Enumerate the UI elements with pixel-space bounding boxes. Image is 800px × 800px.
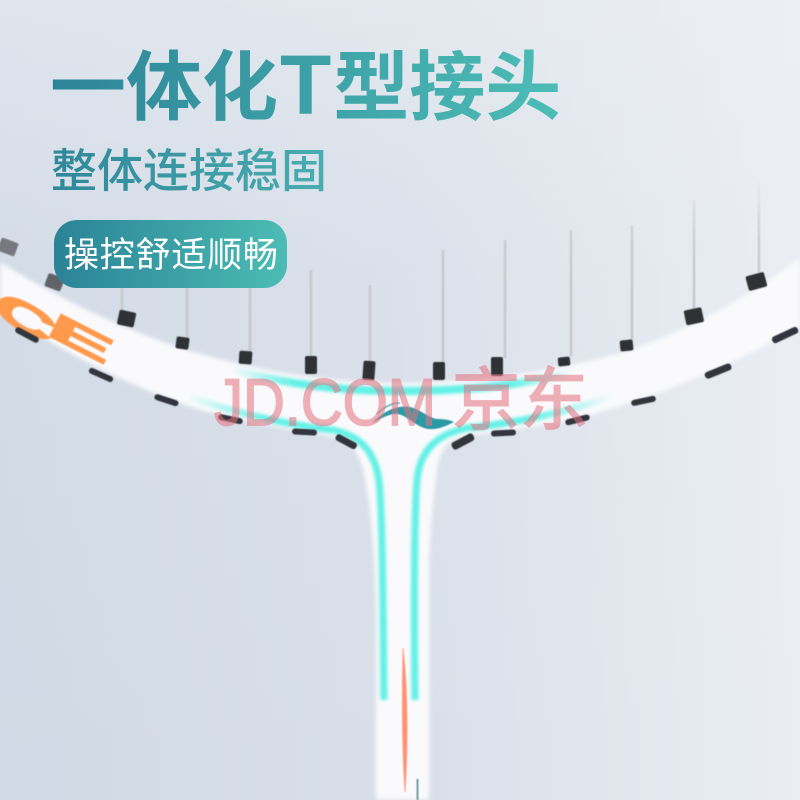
Li-Ning logo — [372, 403, 454, 429]
top grommets — [0, 237, 767, 380]
feature pill — [54, 220, 287, 288]
feature pill: 操控舒适顺畅 — [64, 236, 278, 275]
watermark: JD.COM — [214, 365, 436, 439]
title: 一体化T型接头 — [50, 38, 561, 132]
racket frame and T-joint — [0, 258, 800, 800]
frame lettering: E — [41, 305, 121, 372]
shaft accent stripes — [402, 648, 418, 800]
frame lettering — [0, 283, 121, 372]
bottom grommets — [14, 326, 799, 451]
watermark: 京东 — [452, 363, 588, 439]
watermark — [214, 363, 588, 439]
strings — [122, 180, 759, 364]
cyan joint lines — [190, 370, 612, 700]
subtitle: 整体连接稳固 — [51, 145, 327, 197]
